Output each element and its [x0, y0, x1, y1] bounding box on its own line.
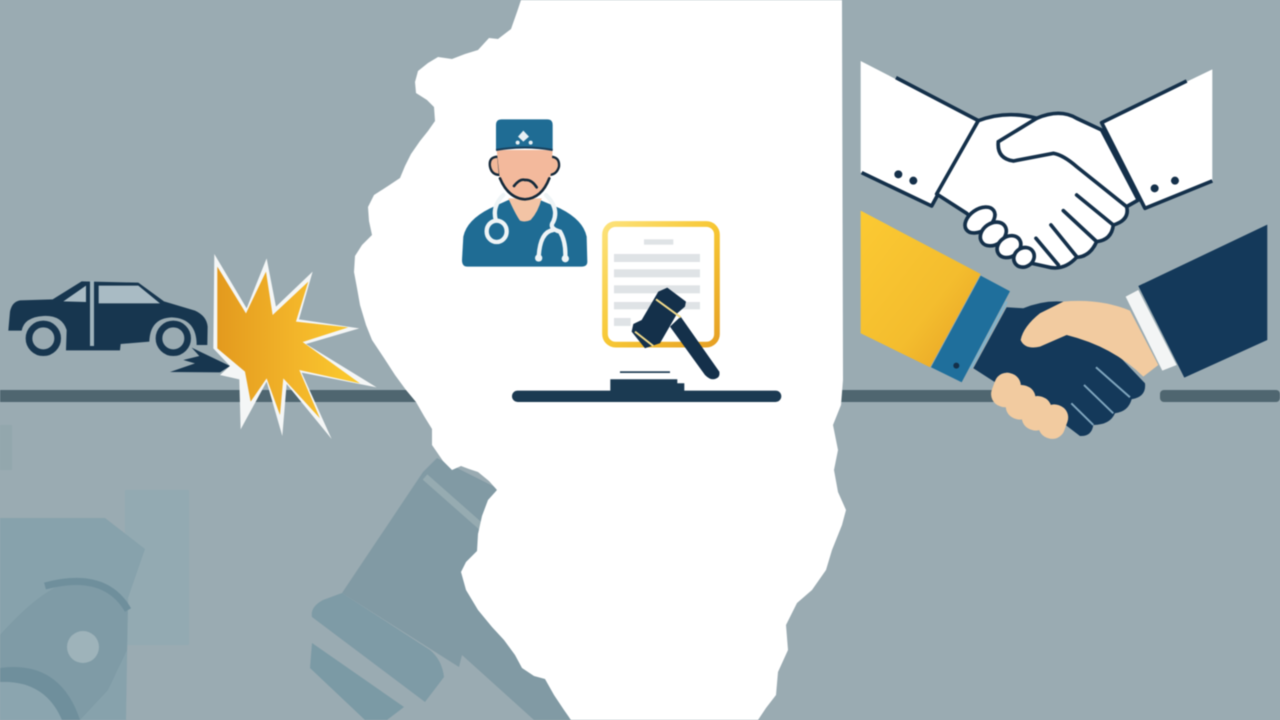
icon: white outline handshake [861, 61, 1212, 271]
doctor ears [490, 157, 559, 175]
white hands [937, 113, 1138, 268]
faded gavel [310, 458, 570, 720]
document lines [614, 239, 700, 326]
left white cuff [861, 61, 978, 206]
navy suit sleeve [1138, 225, 1267, 378]
cap emblem [518, 131, 529, 142]
gavel base [610, 379, 684, 393]
right white cuff [1102, 69, 1212, 208]
tan hand [1021, 301, 1158, 377]
car body [8, 281, 208, 350]
tan fingers [988, 369, 1072, 442]
faded machinery backdrop [0, 425, 189, 720]
doctor face [497, 150, 553, 199]
finger lines [1071, 367, 1130, 425]
white state map [354, 0, 846, 720]
icon: doctor [462, 119, 587, 267]
yellow sleeve [861, 211, 981, 367]
gavel handle [670, 317, 720, 379]
white hand knuckles [960, 202, 1038, 271]
horizontal ground line, left [0, 390, 420, 402]
doctor neck [508, 198, 542, 222]
icon: legal document with gavel [512, 224, 781, 402]
cuff buttons [894, 170, 902, 178]
gavel head [632, 288, 686, 348]
doctor body [462, 200, 587, 267]
thumb and fingers [998, 118, 1127, 265]
document frame [605, 224, 717, 345]
car rear wheel [159, 324, 188, 353]
icon: car [8, 281, 230, 372]
doctor beard [500, 178, 549, 199]
base bar [512, 391, 781, 402]
car door line [90, 281, 94, 346]
car front wheel [29, 324, 58, 353]
white shirt cuff [1126, 290, 1177, 371]
horizontal ground line, right [1160, 390, 1280, 402]
car windows [63, 286, 160, 303]
blue cuff [931, 276, 1010, 382]
doctor cap [496, 119, 553, 150]
stethoscope [487, 195, 565, 257]
navy hand [973, 301, 1145, 436]
debris arrow [170, 348, 230, 372]
horizontal ground line, middle [840, 390, 1000, 402]
icon: collision burst [213, 254, 377, 439]
icon: colour handshake [861, 211, 1267, 442]
